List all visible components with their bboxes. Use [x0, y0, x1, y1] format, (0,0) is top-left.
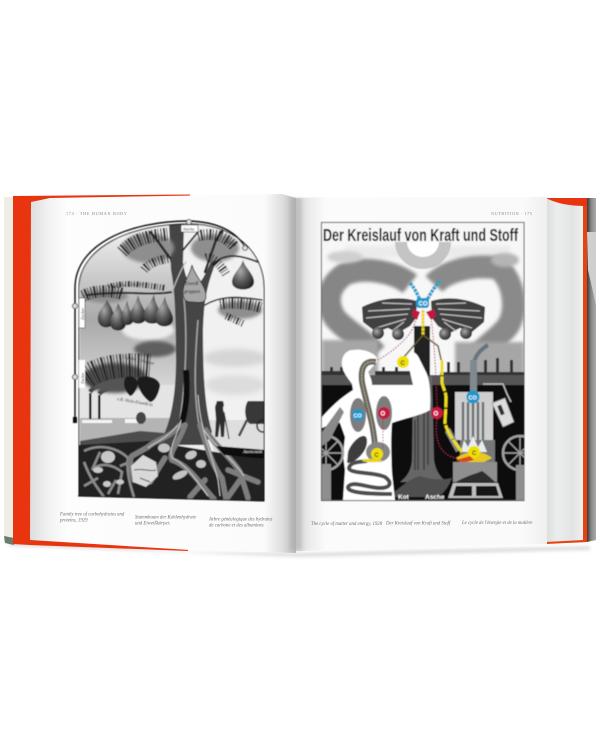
liver [347, 436, 367, 463]
smoke right wisp [491, 253, 519, 267]
top right foliage [198, 234, 234, 246]
pedestal right [516, 465, 524, 500]
ground edge [216, 446, 266, 459]
cover drop shadow [6, 540, 590, 557]
running head right: NUTRITION · 175 [491, 211, 533, 216]
left red cover [13, 197, 31, 539]
right foliage [220, 303, 263, 308]
poster title: Der Kreislauf von Kraft und Stoff [323, 225, 518, 245]
CO blue node top: CO [418, 302, 428, 308]
red fire [456, 456, 474, 463]
blue veins [410, 281, 440, 302]
ash heap [456, 471, 495, 482]
caption French: Arbre généalogique des hydrates [209, 518, 272, 522]
sky over factory [80, 385, 176, 418]
yellow food ball [397, 356, 409, 368]
caption German: und Eiweißkörper. [135, 522, 170, 526]
distant factories haze left [322, 340, 378, 376]
distant factories haze right [455, 342, 524, 376]
yellow food ball: C [400, 361, 406, 367]
left nodules [93, 451, 124, 487]
label Starke: Stärke [183, 226, 194, 232]
pipe frame right [483, 384, 511, 402]
frame end cap [73, 417, 77, 423]
arch frame [75, 221, 264, 501]
smoke right band [434, 267, 513, 366]
branch foliage left [83, 291, 122, 296]
caption German right: Der Kreislauf von Kraft und Stoff [385, 522, 451, 526]
top right red corner [546, 198, 587, 206]
red nodes top [412, 309, 436, 320]
right sky clouds [203, 349, 267, 367]
stomach yellow node [371, 448, 383, 460]
red dotted lines [378, 318, 456, 458]
belt left [322, 407, 344, 446]
illustration: the cycle of matter and energy [309, 222, 537, 501]
Asche label: Asche [425, 494, 445, 501]
sun disc [407, 242, 439, 257]
hatched sky [345, 246, 510, 258]
big central pear [183, 265, 206, 302]
rain shading [80, 240, 176, 385]
top node [186, 220, 192, 224]
smoke left band [329, 270, 410, 354]
fire yellow [456, 452, 492, 462]
intestine [348, 461, 392, 494]
chute [445, 428, 462, 452]
left spine bottom mark [4, 536, 14, 545]
pear inscription: Eiweiß [184, 282, 199, 287]
red dotted body [382, 419, 384, 448]
lungs [350, 396, 392, 432]
branch to fruit and coal [404, 335, 443, 368]
right ground [208, 420, 264, 453]
food pile [362, 459, 382, 462]
village [82, 419, 139, 423]
frame node upper [72, 304, 78, 308]
human CO node: CO [354, 414, 362, 420]
fields dark row [80, 431, 165, 445]
fire text: C [472, 451, 477, 457]
right O node: O [434, 412, 438, 418]
caption German: Stammbaum der Kohlenhydrate [135, 516, 196, 520]
small stones [158, 444, 206, 482]
gutter shadow [290, 198, 302, 550]
white human figure [322, 350, 430, 500]
label Zucker: Zucker [80, 307, 85, 320]
right pear [232, 260, 254, 290]
big stone [131, 455, 158, 487]
captions right [311, 521, 533, 527]
upper branches [88, 228, 262, 305]
red right cover [546, 204, 587, 544]
yellow coal line [442, 360, 462, 452]
leaves left fan [362, 298, 417, 333]
pear inscription 2: gruppen [184, 290, 201, 295]
human CO node [352, 409, 364, 421]
Kot label: Kot [398, 494, 410, 501]
right dark cover shading [587, 198, 596, 542]
caption French right: Le cycle de l'énergie et de la matière [461, 521, 533, 526]
yellow stem [422, 310, 424, 335]
CO furnace node: CO [468, 396, 477, 402]
furnace pipes [463, 402, 483, 440]
sky and landscape [78, 220, 269, 502]
bottom red strip [13, 536, 188, 551]
C fire node [468, 446, 480, 458]
stomach [366, 442, 390, 462]
branch foliage mid [108, 284, 165, 288]
trunk highlights [180, 290, 200, 430]
CO blue node top [416, 298, 429, 308]
chimney [470, 360, 477, 396]
stone cracks [134, 469, 156, 482]
right O node [431, 407, 443, 419]
trunk dark furrow [178, 370, 187, 436]
trunk [158, 224, 216, 445]
root pale lines [148, 395, 244, 496]
band under horizon [322, 375, 524, 385]
caption French: de carbone et des albumines [209, 524, 264, 528]
foliage right of pear [206, 258, 226, 274]
label Zucker lower [79, 360, 85, 388]
stomach yellow node: C [374, 453, 380, 459]
label Starke [181, 225, 198, 232]
tree roots [388, 476, 452, 497]
trunk bark [415, 410, 428, 470]
fire chamber [460, 440, 495, 462]
sun rays [395, 242, 451, 269]
upper left foliage [122, 234, 168, 252]
flames white [461, 436, 487, 452]
root network left [84, 447, 134, 497]
illustration: family tree of carbohydrates and proteins [72, 220, 269, 502]
label Zucker lower: Zucker [80, 372, 85, 384]
underground [78, 441, 266, 502]
pedestal left [322, 464, 331, 500]
factory smoke [88, 386, 109, 396]
top red strip [13, 194, 190, 203]
white cloud left [122, 320, 174, 340]
frame node lower [72, 374, 78, 380]
horizon silhouettes [322, 358, 524, 376]
lower big leaves [85, 365, 150, 378]
wheel right [503, 436, 537, 470]
human O node [378, 407, 390, 419]
left page [30, 194, 296, 553]
captions left [59, 512, 272, 528]
label Zucker [79, 298, 85, 328]
CO furnace node [466, 390, 480, 404]
hanging fruit [372, 327, 472, 340]
ammonia label: Ammoniak [242, 449, 263, 454]
factory smoke column [473, 345, 488, 368]
cart wheel [257, 420, 269, 432]
caption English right: The cycle of matter and energy, 1928 [311, 522, 383, 527]
smoke left wisp [327, 251, 363, 263]
foliage soft tone [82, 233, 262, 393]
inscription lower: Gefüllte Cellulose [122, 354, 155, 366]
wheel left [309, 436, 343, 470]
right sky haze [205, 375, 265, 395]
right cover highlights [587, 232, 596, 305]
leaf highlights [366, 303, 482, 331]
esophagus yellow line [362, 362, 376, 447]
caption English: proteins, 1929 [59, 518, 88, 524]
poster background [322, 222, 524, 500]
furnace panel [455, 392, 493, 440]
distant trees [136, 412, 146, 424]
book: cover and spine edges [4, 194, 596, 557]
factory chimneys [89, 393, 100, 419]
farmer hoe [224, 412, 229, 439]
main roots [130, 425, 258, 499]
pears cluster [98, 294, 173, 330]
esophagus [362, 362, 376, 447]
right node [242, 246, 248, 250]
black ground [322, 385, 524, 501]
gauge [492, 398, 514, 427]
cart table [448, 483, 503, 498]
running head left: 174 · THE HUMAN BODY [66, 211, 128, 216]
dark cloud [134, 341, 176, 357]
leaves right fan [431, 298, 485, 333]
right page block [546, 198, 584, 543]
right foliage small [226, 316, 244, 324]
caption English: Family tree of carbohydrates and [60, 512, 124, 518]
trunk upper dark [414, 326, 430, 376]
leaf clusters [83, 234, 263, 378]
cart openings [453, 486, 499, 496]
inscription fat: z.B. Holz-Eiweiß-in [116, 396, 154, 407]
cart pipe [239, 420, 247, 436]
human O node: O [380, 412, 386, 418]
left cream spine strip [4, 197, 14, 541]
farmer [215, 401, 225, 437]
ash box [453, 462, 497, 482]
tank cart [245, 401, 266, 424]
gauge dark mark [497, 405, 505, 415]
horizon and fields [80, 418, 170, 442]
label Stärke right: Stärke [225, 238, 237, 248]
hanging leaves [124, 376, 160, 402]
right page [296, 197, 547, 551]
tree inscription: Gefüllte Cellulose [112, 281, 145, 288]
trunk lower [400, 376, 446, 482]
foliage near trunk [144, 258, 170, 270]
